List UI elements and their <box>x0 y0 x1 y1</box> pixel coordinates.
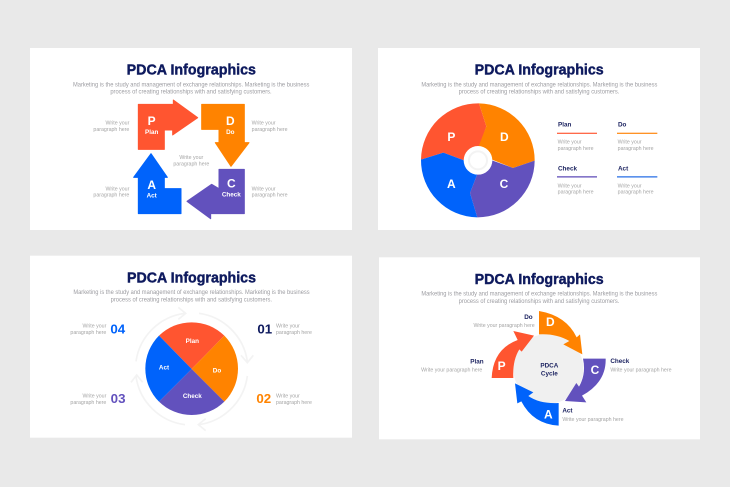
callout 01: Write your <box>276 324 300 330</box>
segment: plan <box>421 103 486 160</box>
slice: plan <box>159 322 224 369</box>
center circle: PDCA <box>540 363 559 370</box>
label: check: Check <box>610 358 630 365</box>
note: plan <box>93 120 130 133</box>
legend: do: Write your <box>618 140 642 146</box>
intro text: Marketing is the study and management of exchange relationships. Marketing is the business <box>73 81 310 88</box>
label: do: Write your paragraph here <box>473 323 535 329</box>
arrow: plan: P <box>498 359 506 373</box>
letters: D <box>500 130 509 144</box>
arrow: plan <box>138 100 198 149</box>
callout 03 <box>70 391 125 406</box>
note: act: paragraph here <box>93 193 129 199</box>
letters: P <box>447 130 455 144</box>
label: do: Do <box>524 314 533 321</box>
callout 01: 01 <box>257 322 273 337</box>
segment: do <box>478 103 535 168</box>
center circle <box>513 334 583 404</box>
label: plan: Write your paragraph here <box>421 367 482 373</box>
callout 01: paragraph here <box>276 330 312 336</box>
intro text <box>73 289 310 303</box>
callout 04 <box>70 322 126 337</box>
arrow: plan <box>492 331 534 378</box>
arrow: do: Do <box>226 129 235 136</box>
intro text <box>421 81 658 96</box>
letters: C <box>500 177 509 191</box>
arrow: check: Check <box>222 191 241 198</box>
slice labels: Plan <box>186 338 199 345</box>
legend: act: paragraph here <box>618 190 654 196</box>
arrow: check: C <box>591 363 600 377</box>
note: plan: Write your <box>106 120 130 126</box>
arrow: do <box>202 104 249 166</box>
callout 02: Write your <box>276 394 300 400</box>
hub <box>464 146 492 175</box>
legend: act: Act <box>618 165 629 172</box>
label: check <box>610 358 672 373</box>
legend: plan: Plan <box>558 122 571 129</box>
legend: plan: paragraph here <box>558 146 594 152</box>
arrow: act: Act <box>147 193 158 200</box>
note: do <box>252 120 288 133</box>
wheel chart <box>421 103 535 217</box>
slice labels <box>159 338 221 400</box>
note: check: Write your <box>252 186 276 192</box>
callout 04: 04 <box>110 322 126 337</box>
arrow: do: D <box>546 315 555 329</box>
title: PDCA Infographics <box>475 272 604 288</box>
arrow: do: D <box>226 114 235 128</box>
letters: A <box>447 177 456 191</box>
callout 03: Write your <box>83 394 107 400</box>
title: PDCA Infographics <box>475 63 604 79</box>
legend: check: paragraph here <box>558 190 594 196</box>
intro text: process of creating relationships with and satisfying customers. <box>459 89 619 96</box>
segment: check <box>470 160 535 217</box>
legend: act <box>617 165 657 196</box>
label: act: Write your paragraph here <box>562 417 624 423</box>
label: act <box>562 407 624 423</box>
slice: do <box>192 336 238 402</box>
arrow: check: C <box>227 177 236 191</box>
pie chart <box>145 322 238 415</box>
arrow: check <box>187 169 244 219</box>
panel: numbered pie <box>30 256 352 438</box>
note: center: paragraph here <box>173 161 209 167</box>
arrow: plan: P <box>148 114 156 128</box>
legend: check: Check <box>558 165 577 172</box>
callout 02: 02 <box>256 391 271 406</box>
legend: check <box>557 165 597 196</box>
note: plan: paragraph here <box>93 127 129 133</box>
arrow: act: A <box>147 178 156 192</box>
arrow: check <box>565 359 606 402</box>
legend: do: paragraph here <box>618 146 654 152</box>
intro text <box>421 290 658 305</box>
letters <box>447 130 509 191</box>
title: PDCA Infographics <box>127 271 256 287</box>
legend: do: Do <box>618 122 627 129</box>
legend: act: Write your <box>618 183 642 189</box>
slice: act <box>145 336 192 402</box>
note: center: Write your <box>179 155 203 161</box>
note: act: Write your <box>106 186 130 192</box>
note: act <box>93 186 130 199</box>
intro text: Marketing is the study and management of exchange relationships. Marketing is the business <box>421 290 658 297</box>
note: check <box>252 186 288 199</box>
center circle: Cycle <box>541 370 558 377</box>
legend: plan: Write your <box>558 140 582 146</box>
intro text: Marketing is the study and management of exchange relationships. Marketing is the business <box>73 289 310 296</box>
arrow: do <box>539 311 582 354</box>
arrow: act <box>134 154 181 214</box>
callout 02 <box>256 391 312 406</box>
arrow: act <box>515 383 559 426</box>
segment: act <box>421 153 477 217</box>
slice: check <box>159 369 224 415</box>
note: center <box>173 155 209 167</box>
callout 03: 03 <box>111 391 125 406</box>
legend: check: Write your <box>558 183 582 189</box>
label: plan <box>421 359 484 373</box>
panel: segmented wheel <box>378 48 700 230</box>
label: act: Act <box>562 407 573 414</box>
intro text: process of creating relationships with and satisfying customers. <box>459 298 619 305</box>
legend: do <box>617 122 657 152</box>
callout 03: paragraph here <box>70 400 106 406</box>
panel: curved arrow cycle <box>379 257 700 439</box>
arrow: plan: Plan <box>145 129 158 136</box>
slice labels: Do <box>213 367 221 374</box>
arrow: act: A <box>544 407 553 421</box>
intro text: process of creating relationships with and satisfying customers. <box>110 89 272 96</box>
note: check: paragraph here <box>252 193 288 199</box>
cycle arrows <box>131 307 253 431</box>
intro text: Marketing is the study and management of exchange relationships. Marketing is the business <box>421 81 658 88</box>
legend: plan <box>557 122 597 152</box>
slice labels: Check <box>183 393 202 400</box>
note: do: paragraph here <box>252 127 288 133</box>
title: PDCA Infographics <box>127 63 256 79</box>
callout 04: paragraph here <box>70 330 106 336</box>
label: plan: Plan <box>470 359 484 366</box>
slice labels: Act <box>159 364 170 371</box>
callout 02: paragraph here <box>276 400 312 406</box>
callout 01 <box>257 322 312 337</box>
callout 04: Write your <box>83 324 107 330</box>
intro text: process of creating relationships with and satisfying customers. <box>111 296 272 303</box>
label: check: Write your paragraph here <box>610 367 672 373</box>
panel: arrow square PDCA <box>30 48 352 230</box>
note: do: Write your <box>252 120 276 126</box>
label: do <box>473 314 535 329</box>
intro text <box>73 81 310 96</box>
